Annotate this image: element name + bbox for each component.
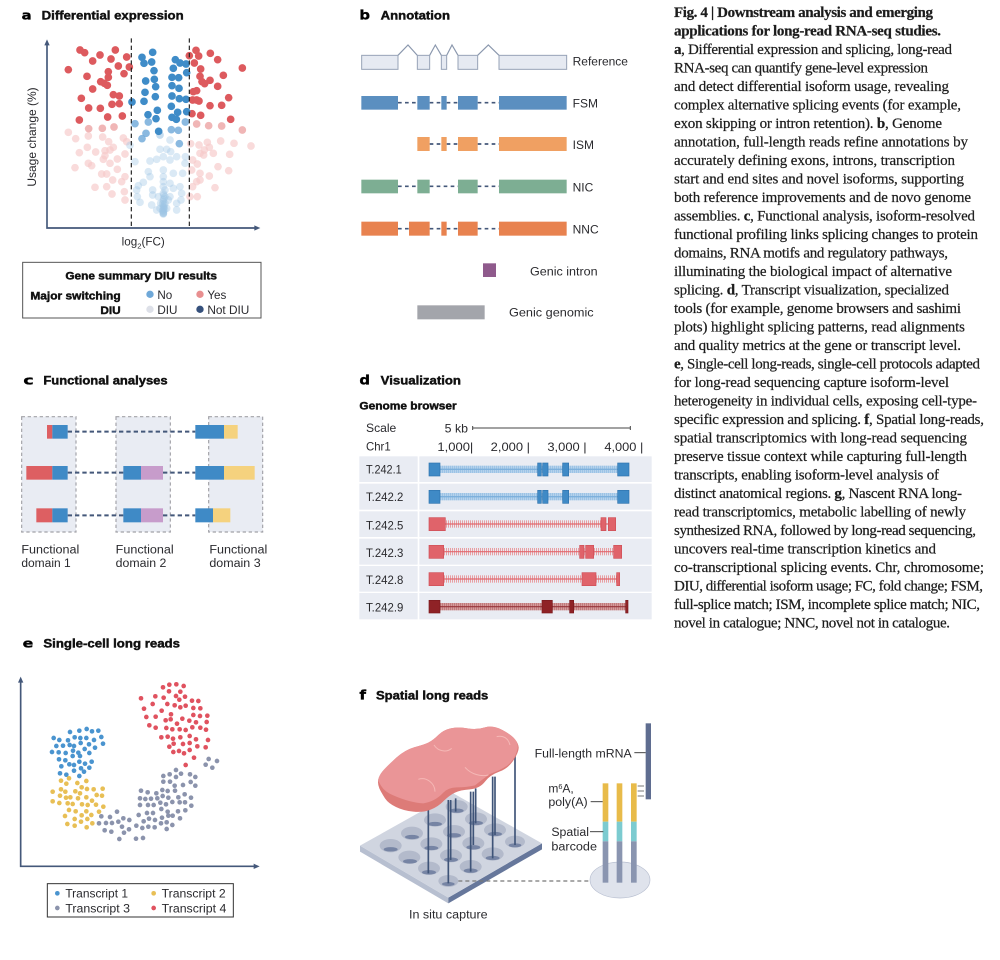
heading b: b bbox=[359, 9, 370, 24]
transcript 1 cluster bbox=[50, 727, 105, 778]
m6A label: poly(A) bbox=[548, 795, 588, 809]
legend: DIU bbox=[157, 304, 177, 317]
caption: exon skipping or intron retention). b, Genome bbox=[674, 116, 942, 132]
track T.242.5: T.242.5 bbox=[366, 520, 403, 533]
legend bbox=[47, 884, 233, 917]
reference isoform bbox=[362, 45, 628, 69]
caption: transcripts, enabling isoform-level analysis of bbox=[674, 468, 939, 484]
NIC isoform: NIC bbox=[573, 180, 594, 194]
caption: preserve tissue context while capturing full-length bbox=[674, 449, 968, 465]
caption: heterogeneity in individual cells, exposing cell-type- bbox=[674, 394, 977, 410]
heading e: e bbox=[23, 636, 33, 651]
heading c: Functional analyses bbox=[43, 374, 168, 388]
caption: Fig. 4 | Downstream analysis and emerging bbox=[674, 5, 934, 21]
NNC isoform bbox=[361, 222, 599, 236]
panel a: differential expression bbox=[22, 8, 261, 318]
caption: synthesized RNA, followed by long-read sequencing, bbox=[674, 523, 976, 539]
caption: novel in catalogue; NNC, novel not in catalogue. bbox=[674, 616, 950, 632]
domain 2 label: domain 2 bbox=[116, 556, 166, 570]
track T.242.3 bbox=[366, 545, 622, 560]
heading c: c bbox=[23, 373, 34, 388]
genic intron: Genic intron bbox=[530, 264, 598, 278]
y axis arrowhead bbox=[44, 39, 50, 45]
domain 2 label bbox=[116, 542, 174, 570]
caption bbox=[674, 5, 984, 632]
caption: full-splice match; ISM, incomplete splice match; NIC, bbox=[674, 597, 980, 613]
axes bbox=[18, 677, 260, 869]
caption: tools (for example, genome browsers and sashimi bbox=[674, 301, 961, 317]
legend: Transcript 1 bbox=[65, 888, 128, 901]
chromosome ruler: 4,000 | bbox=[604, 441, 643, 454]
caption: complex alternative splicing events (for example, bbox=[674, 98, 961, 114]
legend: Not DIU bbox=[207, 304, 249, 317]
heading a: Differential expression bbox=[42, 9, 184, 23]
axes bbox=[47, 43, 257, 228]
row 1 isoform bbox=[47, 425, 238, 439]
caption: and detect differential isoform usage, revealing bbox=[674, 79, 950, 95]
panel f: spatial long reads bbox=[359, 688, 651, 921]
genic genomic bbox=[417, 305, 594, 320]
caption: spatial transcriptomics with long-read sequencing bbox=[674, 430, 968, 446]
spatial spot bbox=[590, 862, 650, 898]
track T.242.5 bbox=[366, 518, 616, 533]
genic intron bbox=[483, 263, 598, 278]
legend: Gene summary DIU results bbox=[65, 270, 217, 282]
transcript 2 cluster bbox=[50, 776, 106, 830]
spatial barcode label bbox=[551, 825, 603, 853]
track T.242.1 bbox=[366, 463, 629, 477]
transcript 4 cluster bbox=[139, 682, 210, 767]
FSM isoform: FSM bbox=[573, 97, 598, 111]
track T.242.9 bbox=[366, 600, 628, 615]
caption: plots) highlight splicing patterns, read alignments bbox=[674, 320, 965, 336]
spatial barcode label: barcode bbox=[551, 839, 597, 853]
caption: e, Single-cell long-reads, single-cell protocols adapted bbox=[674, 356, 980, 372]
caption: a, Differential expression and splicing, long-read bbox=[674, 42, 952, 58]
connectors bbox=[68, 432, 195, 515]
panel d: visualization bbox=[359, 374, 652, 619]
domain 2 label: Functional bbox=[116, 542, 174, 556]
genic genomic: Genic genomic bbox=[509, 306, 594, 320]
track T.242.9: T.242.9 bbox=[366, 602, 403, 615]
caption: functional profiling links splicing changes to protein bbox=[674, 227, 978, 243]
in situ capture label: In situ capture bbox=[409, 907, 488, 921]
heading f: Spatial long reads bbox=[376, 688, 489, 702]
heading f: f bbox=[359, 688, 366, 703]
chromosome ruler: 2,000 | bbox=[491, 441, 530, 454]
caption: read transcriptomics, metabolic labelling of newly bbox=[674, 504, 966, 520]
chromosome ruler: Chr1 bbox=[366, 440, 391, 453]
caption: splicing. d, Transcript visualization, specialized bbox=[674, 282, 950, 298]
domain 3 label bbox=[209, 542, 267, 570]
x axis arrowhead bbox=[254, 225, 260, 231]
track T.242.2 bbox=[366, 490, 629, 504]
track T.242.3: T.242.3 bbox=[366, 547, 403, 560]
legend: Transcript 2 bbox=[162, 888, 226, 901]
caption: applications for long-read RNA-seq studies. bbox=[674, 24, 941, 40]
x axis label: log bbox=[122, 235, 137, 248]
transcript 3 cluster bbox=[97, 757, 219, 841]
reference isoform: Reference bbox=[573, 55, 628, 69]
domain 1 label: domain 1 bbox=[21, 556, 71, 570]
chromosome ruler: 1,000| bbox=[437, 441, 473, 454]
heading e: Single-cell long reads bbox=[43, 637, 180, 651]
NNC isoform: NNC bbox=[573, 222, 599, 236]
scale: 5 kb bbox=[445, 423, 468, 436]
caption: start and end sites and novel isoforms, supporting bbox=[674, 172, 964, 188]
capture pillars bbox=[428, 755, 515, 883]
domain 1 label bbox=[21, 542, 79, 570]
legend bbox=[23, 262, 261, 318]
caption: DIU, differential isoform usage; FC, fold change; FSM, bbox=[674, 578, 983, 594]
full-length mRNA: Full-length mRNA bbox=[535, 746, 632, 760]
x axis label: (FC) bbox=[141, 235, 165, 248]
legend: No bbox=[157, 289, 172, 302]
track T.242.8: T.242.8 bbox=[366, 574, 403, 587]
heading d: Visualization bbox=[381, 374, 461, 388]
capture probes bbox=[603, 783, 637, 883]
legend: Transcript 4 bbox=[162, 902, 227, 915]
caption: co-transcriptional splicing events. Chr, chromosome; bbox=[674, 560, 984, 576]
track T.242.1: T.242.1 bbox=[366, 464, 402, 477]
caption: illuminating the biological impact of alternative bbox=[674, 264, 952, 280]
capture slide bbox=[360, 793, 542, 903]
m6A label: A, bbox=[562, 782, 574, 796]
caption: RNA-seq can quantify gene-level expression bbox=[674, 60, 928, 76]
caption: domains, RNA motifs and regulatory pathways, bbox=[674, 246, 948, 262]
domain 3 label: Functional bbox=[209, 542, 267, 556]
genome browser title: Genome browser bbox=[359, 400, 457, 412]
spatial barcode label: Spatial bbox=[551, 825, 589, 839]
ISM isoform: ISM bbox=[573, 138, 594, 152]
poly(A) tick marks bbox=[638, 786, 644, 796]
scale: Scale bbox=[366, 422, 396, 435]
chromosome ruler: 3,000 | bbox=[547, 441, 587, 454]
caption: specific expression and splicing. f, Spatial long-reads, bbox=[674, 412, 984, 428]
domain 3 label: domain 3 bbox=[209, 556, 261, 570]
ISM isoform bbox=[417, 137, 594, 152]
tissue section bbox=[378, 727, 519, 812]
row backgrounds bbox=[359, 456, 652, 619]
y axis label: Usage change (%) bbox=[26, 87, 39, 187]
x axis label: 2 bbox=[137, 241, 141, 250]
row 3 isoform bbox=[36, 508, 230, 522]
legend: Transcript 3 bbox=[65, 902, 130, 915]
caption: both reference improvements and de novo genome bbox=[674, 190, 971, 206]
chromosome ruler bbox=[366, 440, 643, 454]
panel e: single-cell long reads bbox=[18, 636, 260, 917]
domain columns bbox=[22, 417, 263, 532]
heading b bbox=[359, 9, 450, 24]
NIC isoform bbox=[361, 180, 594, 194]
FSM isoform bbox=[361, 96, 598, 111]
caption: for long-read sequencing capture isoform-level bbox=[674, 375, 949, 391]
dashed link bbox=[458, 879, 589, 883]
volcano plot bbox=[64, 38, 255, 228]
caption: uncovers real-time transcription kinetics and bbox=[674, 542, 936, 558]
legend: Major switching bbox=[30, 290, 121, 302]
heading a: a bbox=[22, 8, 32, 23]
legend: DIU bbox=[100, 305, 121, 317]
heading d bbox=[359, 374, 461, 389]
caption: assemblies. c, Functional analysis, isoform-resolved bbox=[674, 208, 976, 224]
heading d: d bbox=[359, 374, 370, 389]
scale bbox=[366, 422, 630, 436]
m6A label: 6 bbox=[558, 782, 562, 791]
heading b: Annotation bbox=[381, 9, 450, 23]
caption: distinct anatomical regions. g, Nascent RNA long- bbox=[674, 486, 962, 502]
caption: and quality metrics at the gene or transcript level. bbox=[674, 338, 961, 354]
caption: accurately defining exons, introns, transcription bbox=[674, 153, 956, 169]
row 2 isoform bbox=[26, 466, 255, 480]
m6A label: m bbox=[548, 782, 558, 796]
m6A label bbox=[548, 782, 603, 809]
track T.242.2: T.242.2 bbox=[366, 491, 403, 504]
track T.242.8 bbox=[366, 573, 620, 587]
full-length mRNA bbox=[535, 723, 651, 799]
caption: annotation, full-length reads refine annotations by bbox=[674, 134, 968, 150]
legend: Yes bbox=[207, 289, 227, 302]
panel c: functional analyses bbox=[21, 373, 267, 570]
domain 1 label: Functional bbox=[21, 542, 79, 556]
panel b: annotation bbox=[359, 9, 628, 320]
